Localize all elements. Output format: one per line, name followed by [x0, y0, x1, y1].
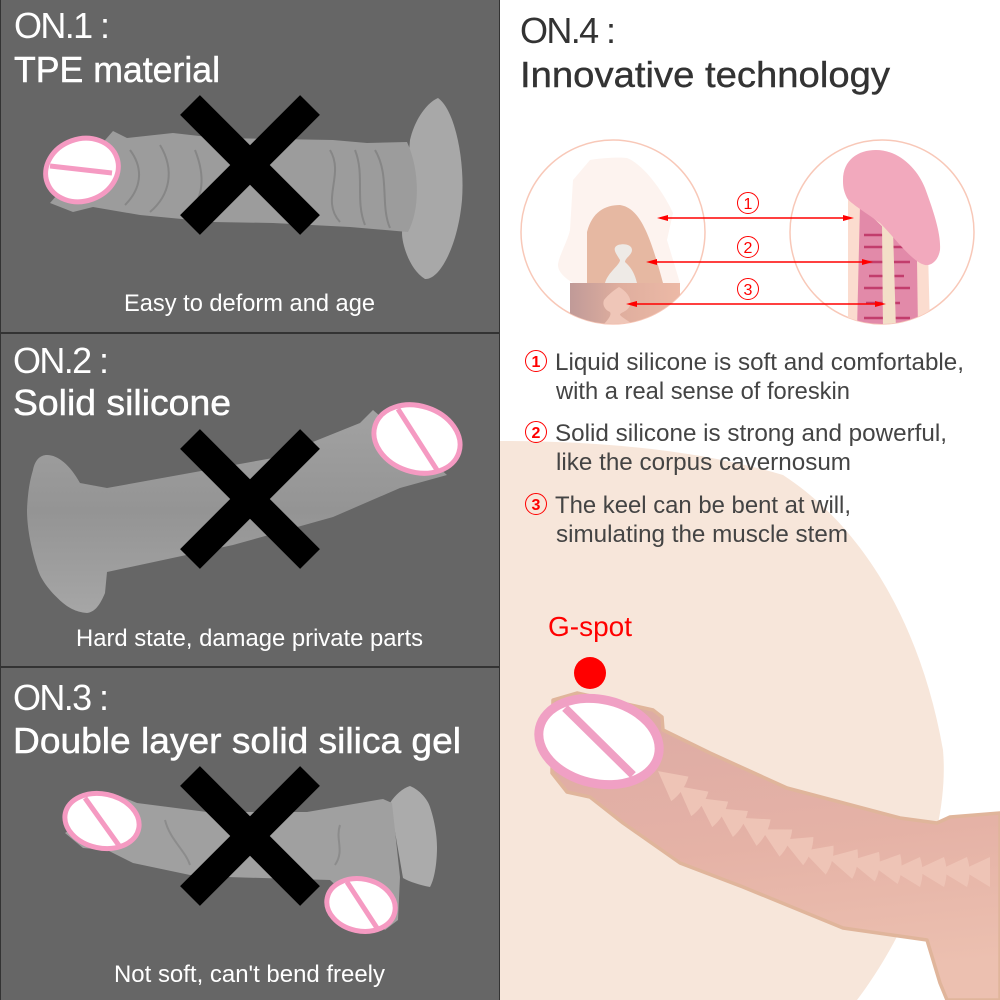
- panel: ON.1 TPE material: [1, 0, 499, 332]
- icon: pink censor oval 2: [322, 872, 400, 938]
- icon: pink censor oval: [365, 394, 469, 484]
- background: beige shape: [500, 441, 944, 1000]
- text block 3: The keel can be bent at will,: [555, 492, 851, 519]
- icon: black X: [190, 776, 310, 896]
- text block 1: with a real sense of foreskin: [555, 378, 850, 405]
- text block 1: Liquid silicone is soft and comfortable,: [555, 349, 964, 376]
- diagram: left cross-section circle: [521, 140, 705, 328]
- product: flesh-tone cross-section: [552, 693, 1000, 1000]
- caption: Not soft, can't bend freely: [114, 961, 385, 988]
- arrow 1: [657, 215, 854, 221]
- marker 1: [738, 192, 758, 214]
- product: grey ribbed: [50, 98, 463, 279]
- arrow 3: [626, 301, 886, 307]
- diagram: right cross-section circle: [790, 140, 974, 330]
- heading: Double layer: Double layer solid silica gel: [13, 720, 461, 761]
- product: grey smooth: [27, 410, 447, 613]
- caption: Hard state, damage private parts: [76, 625, 423, 652]
- heading: ON.3: ON.3 :: [13, 677, 109, 718]
- heading: Innovative technology: Innovative technology: [520, 54, 890, 95]
- text block 2: [526, 420, 947, 476]
- heading: Solid silicone: Solid silicone: [13, 382, 231, 423]
- marker 3: [738, 278, 758, 300]
- text block 3: [526, 492, 851, 548]
- product: grey veined: [65, 786, 437, 930]
- marker 2: [738, 236, 758, 258]
- label: G-spot: G-spot: [548, 611, 632, 642]
- marker 2: 2: [744, 240, 753, 257]
- icon: G-spot dot: [574, 657, 606, 689]
- heading: TPE material: TPE material: [14, 49, 220, 90]
- keel segments: [648, 761, 990, 887]
- icon: black X: [190, 439, 310, 559]
- panel: ON.2 Solid silicone: [1, 334, 499, 666]
- marker 1: 1: [744, 196, 753, 213]
- text block 1: 1: [532, 354, 541, 371]
- text block 2: Solid silicone is strong and powerful,: [555, 420, 947, 447]
- icon: black X: [190, 105, 310, 225]
- background: left column frame: [0, 0, 500, 1000]
- caption: Easy to deform and age: [124, 290, 375, 317]
- icon: pink censor oval 1: [60, 787, 144, 855]
- heading: ON.4: ON.4 :: [520, 10, 616, 51]
- heading: ON.2: ON.2 :: [13, 340, 109, 381]
- text block 1: [526, 349, 964, 405]
- text block 2: like the corpus cavernosum: [556, 449, 851, 476]
- panel: ON.3 Double layer: [1, 668, 499, 1000]
- text block 3: simulating the muscle stem: [556, 521, 848, 548]
- icon: pink censor oval: [37, 128, 127, 212]
- text block 2: 2: [532, 425, 541, 442]
- text block 3: 3: [532, 497, 541, 514]
- arrow 2: [646, 259, 873, 265]
- icon: pink censor oval large: [530, 687, 668, 796]
- marker 3: 3: [744, 282, 753, 299]
- heading: ON.1: ON.1 :: [14, 5, 110, 46]
